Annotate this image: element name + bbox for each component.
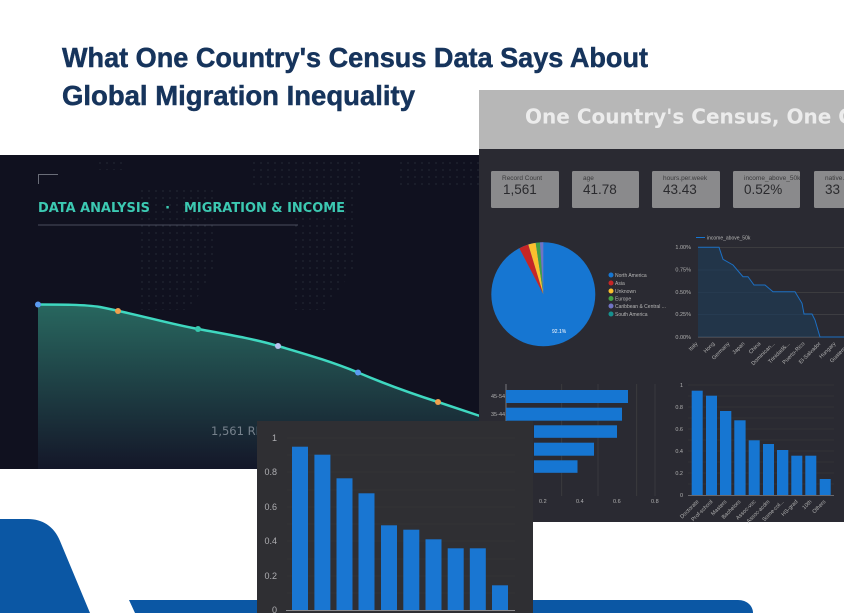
line chart: income above 50k — [675, 236, 844, 367]
vertical bar chart: education: Assoc-acdm — [746, 499, 772, 525]
vertical bar chart: education: Some-col... — [761, 499, 786, 523]
vertical bar chart: education: 1 — [680, 383, 683, 389]
horizontal bar chart — [491, 384, 659, 505]
horizontal bar chart: 0.4 — [576, 499, 584, 505]
horizontal bar chart: 45-54 — [491, 394, 505, 400]
area chart — [35, 302, 480, 469]
line chart: income above 50k: Japan — [732, 341, 746, 356]
vertical bar chart: education: Masters — [710, 499, 729, 517]
pie legend: Asia — [615, 281, 625, 287]
heading: data analysis: DATA ANALYSIS — [38, 200, 150, 216]
pie legend: Caribbean & Central ... — [615, 304, 666, 310]
title — [62, 42, 648, 111]
line chart: income above 50k: Dominican... — [751, 341, 777, 367]
panel: front bar chart: 0.8 — [264, 467, 277, 477]
line chart: income above 50k: 0.25% — [675, 312, 691, 318]
vertical bar chart: education: HS-grad — [781, 499, 799, 518]
vertical bar chart: education: Assoc-voc — [735, 499, 758, 521]
corner bracket — [38, 174, 58, 184]
vertical bar chart: education: 10th — [802, 499, 813, 511]
line chart: income above 50k: El-Salvador — [798, 341, 823, 366]
line chart: income above 50k: Hong — [703, 341, 716, 355]
blue decorative shape — [0, 519, 753, 613]
line chart: income above 50k: Italy — [688, 341, 700, 353]
panel: data analysis dark card — [0, 155, 480, 469]
panel: front bar chart: 0.4 — [264, 536, 277, 546]
horizontal bar chart: 0.8 — [651, 499, 659, 505]
vertical bar chart: education: Prof-school — [690, 499, 714, 523]
vertical bar chart: education: 0.8 — [675, 405, 683, 411]
vertical bar chart: education: 0.6 — [675, 427, 683, 433]
line chart: income above 50k: 0.50% — [675, 290, 691, 296]
line chart: income above 50k: China — [748, 341, 763, 356]
panel: front bar chart: 0.6 — [264, 502, 277, 512]
records caption: 1,561 RECORDS — [211, 424, 304, 438]
heading: data analysis: MIGRATION & INCOME — [184, 200, 345, 216]
KPI cards: 0.52% — [744, 182, 782, 197]
heading: data analysis — [38, 200, 345, 216]
KPI cards: 1,561 — [503, 182, 537, 197]
KPI cards — [491, 171, 844, 208]
panel: census dashboard — [479, 90, 844, 525]
line chart: income above 50k: Trinidad&... — [767, 341, 792, 365]
panel: front bar chart: 1 — [272, 433, 277, 443]
KPI cards: 33 — [825, 182, 840, 197]
vertical bar chart: education: 0 — [680, 493, 683, 499]
panel: front bar chart: 0.2 — [264, 571, 277, 581]
KPI cards: age — [583, 175, 594, 182]
panel: front bar chart — [257, 421, 533, 613]
line chart: income above 50k: Germany — [711, 341, 732, 361]
title: What One Country's Census Data Says About — [62, 42, 648, 73]
pie legend — [608, 272, 666, 318]
line chart: income above 50k: Hungary — [818, 341, 838, 360]
pie legend: South America — [615, 312, 648, 318]
vertical bar chart: education: Bachelors — [721, 499, 743, 521]
heading: data analysis: · — [165, 200, 170, 216]
vertical bar chart: education: Doctorate — [679, 499, 700, 520]
KPI cards: 43.43 — [663, 182, 697, 197]
vertical bar chart: education: Others — [811, 499, 828, 515]
vertical bar chart: education: 0.2 — [675, 471, 683, 477]
horizontal bar chart: 0.6 — [613, 499, 621, 505]
pie legend: Europe — [615, 296, 631, 302]
vertical bar chart: education: 0.4 — [675, 449, 683, 455]
pie legend: North America — [615, 273, 647, 279]
horizontal bar chart: 0.2 — [539, 499, 547, 505]
line chart: income above 50k: Puerto-Rico — [782, 341, 806, 366]
KPI cards: 41.78 — [583, 182, 617, 197]
KPI cards: income_above_50k — [744, 175, 801, 182]
line chart: income above 50k: income_above_50k — [707, 236, 751, 242]
horizontal bar chart: 35-44 — [491, 412, 505, 418]
line chart: income above 50k: 0.00% — [675, 335, 691, 341]
KPI cards: hours.per.week — [663, 175, 708, 182]
pie chart — [491, 242, 595, 346]
dashboard header — [479, 90, 844, 149]
KPI cards: Record Count — [502, 175, 542, 182]
pie legend: Unknown — [615, 289, 636, 295]
pie chart: 92.1% — [552, 329, 567, 335]
line chart: income above 50k: 0.75% — [675, 268, 691, 274]
line chart: income above 50k: 1.00% — [675, 245, 691, 251]
title: Global Migration Inequality — [62, 80, 415, 111]
vertical bar chart: education — [675, 383, 834, 525]
